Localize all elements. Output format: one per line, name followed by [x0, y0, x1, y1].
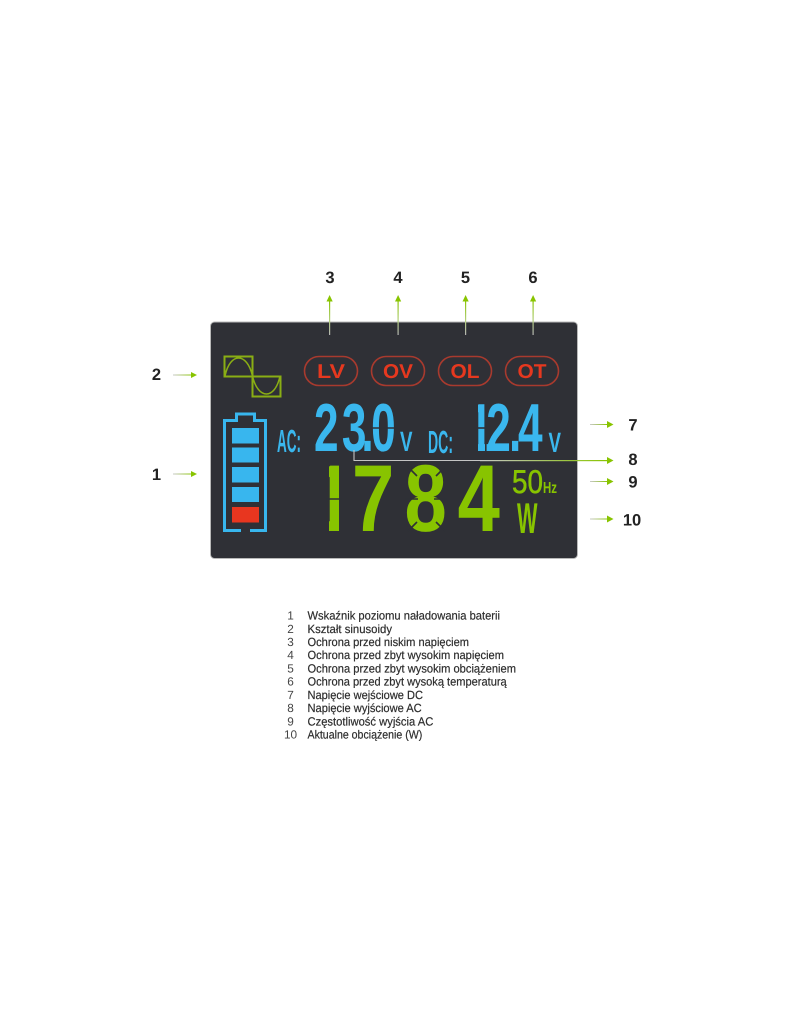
legend [284, 608, 516, 742]
unit: W: W [517, 495, 538, 543]
reading: frequency 50Hz: 50 [512, 463, 543, 500]
indicator: OV [372, 356, 424, 386]
callout 3: 3 [325, 269, 335, 287]
legend: Częstotliwość wyjścia AC [308, 714, 434, 728]
legend: 5 [287, 662, 294, 676]
callout 2 [152, 366, 197, 384]
callout 6 [528, 269, 538, 335]
legend: 7 [287, 688, 294, 702]
legend: Ochrona przed zbyt wysokim napięciem [308, 648, 504, 662]
legend: 8 [287, 701, 294, 715]
reading: AC voltage 23.0: 23.0 [314, 390, 396, 466]
callout 5: 5 [461, 269, 470, 287]
unit: V: V [548, 427, 561, 458]
indicator: OT [506, 356, 558, 386]
callout 10: 10 [623, 512, 641, 530]
legend: 6 [287, 675, 294, 689]
indicator: OT: OT [518, 361, 546, 383]
legend: Napięcie wyjściowe AC [308, 701, 422, 715]
legend: Wskaźnik poziomu naładowania baterii [308, 608, 500, 622]
callout 9 [590, 474, 638, 492]
legend: 4 [287, 648, 294, 662]
callout 9: 9 [628, 474, 638, 492]
callout 4 [393, 269, 403, 335]
callout 2: 2 [152, 366, 161, 384]
indicator: LV [304, 356, 358, 386]
callout 8: 8 [628, 451, 638, 469]
callout 3 [325, 269, 335, 335]
indicator: LV: LV [317, 361, 346, 383]
unit: V: V [400, 426, 413, 457]
reading: power 1784: 1784 [312, 446, 500, 552]
reading: frequency 50Hz: Hz [543, 480, 557, 497]
legend: Ochrona przed zbyt wysoką temperaturą [308, 675, 507, 689]
reading: DC voltage 12.4: 12.4 [468, 390, 543, 466]
icon: battery level [224, 414, 266, 530]
callout 1 [152, 466, 197, 484]
indicator: OV: OV [383, 361, 414, 383]
callout 6: 6 [528, 269, 538, 287]
legend: 3 [287, 635, 294, 649]
callout 1: 1 [152, 466, 161, 484]
legend: 10 [284, 728, 297, 742]
callout 7 [590, 416, 638, 434]
callout 7: 7 [628, 416, 638, 434]
callout 4: 4 [393, 269, 403, 287]
callout 5 [461, 269, 470, 335]
panel: LCD display: AC: [277, 423, 301, 459]
indicator: OL: OL [450, 361, 480, 383]
legend: Kształt sinusoidy [308, 622, 392, 636]
icon: sine wave [224, 356, 280, 396]
legend: Ochrona przed zbyt wysokim obciążeniem [308, 662, 516, 676]
legend: 9 [287, 714, 294, 728]
legend: Ochrona przed niskim napięciem [308, 635, 469, 649]
panel: LCD display [210, 322, 578, 558]
panel: LCD display: DC: [428, 424, 453, 460]
callout 8 [354, 450, 638, 469]
legend: 1 [287, 608, 294, 622]
legend: Napięcie wejściowe DC [308, 688, 423, 702]
callout 10 [590, 512, 641, 530]
legend: Aktualne obciążenie (W) [308, 728, 422, 742]
indicator: OL [438, 356, 492, 386]
legend: 2 [287, 622, 294, 636]
